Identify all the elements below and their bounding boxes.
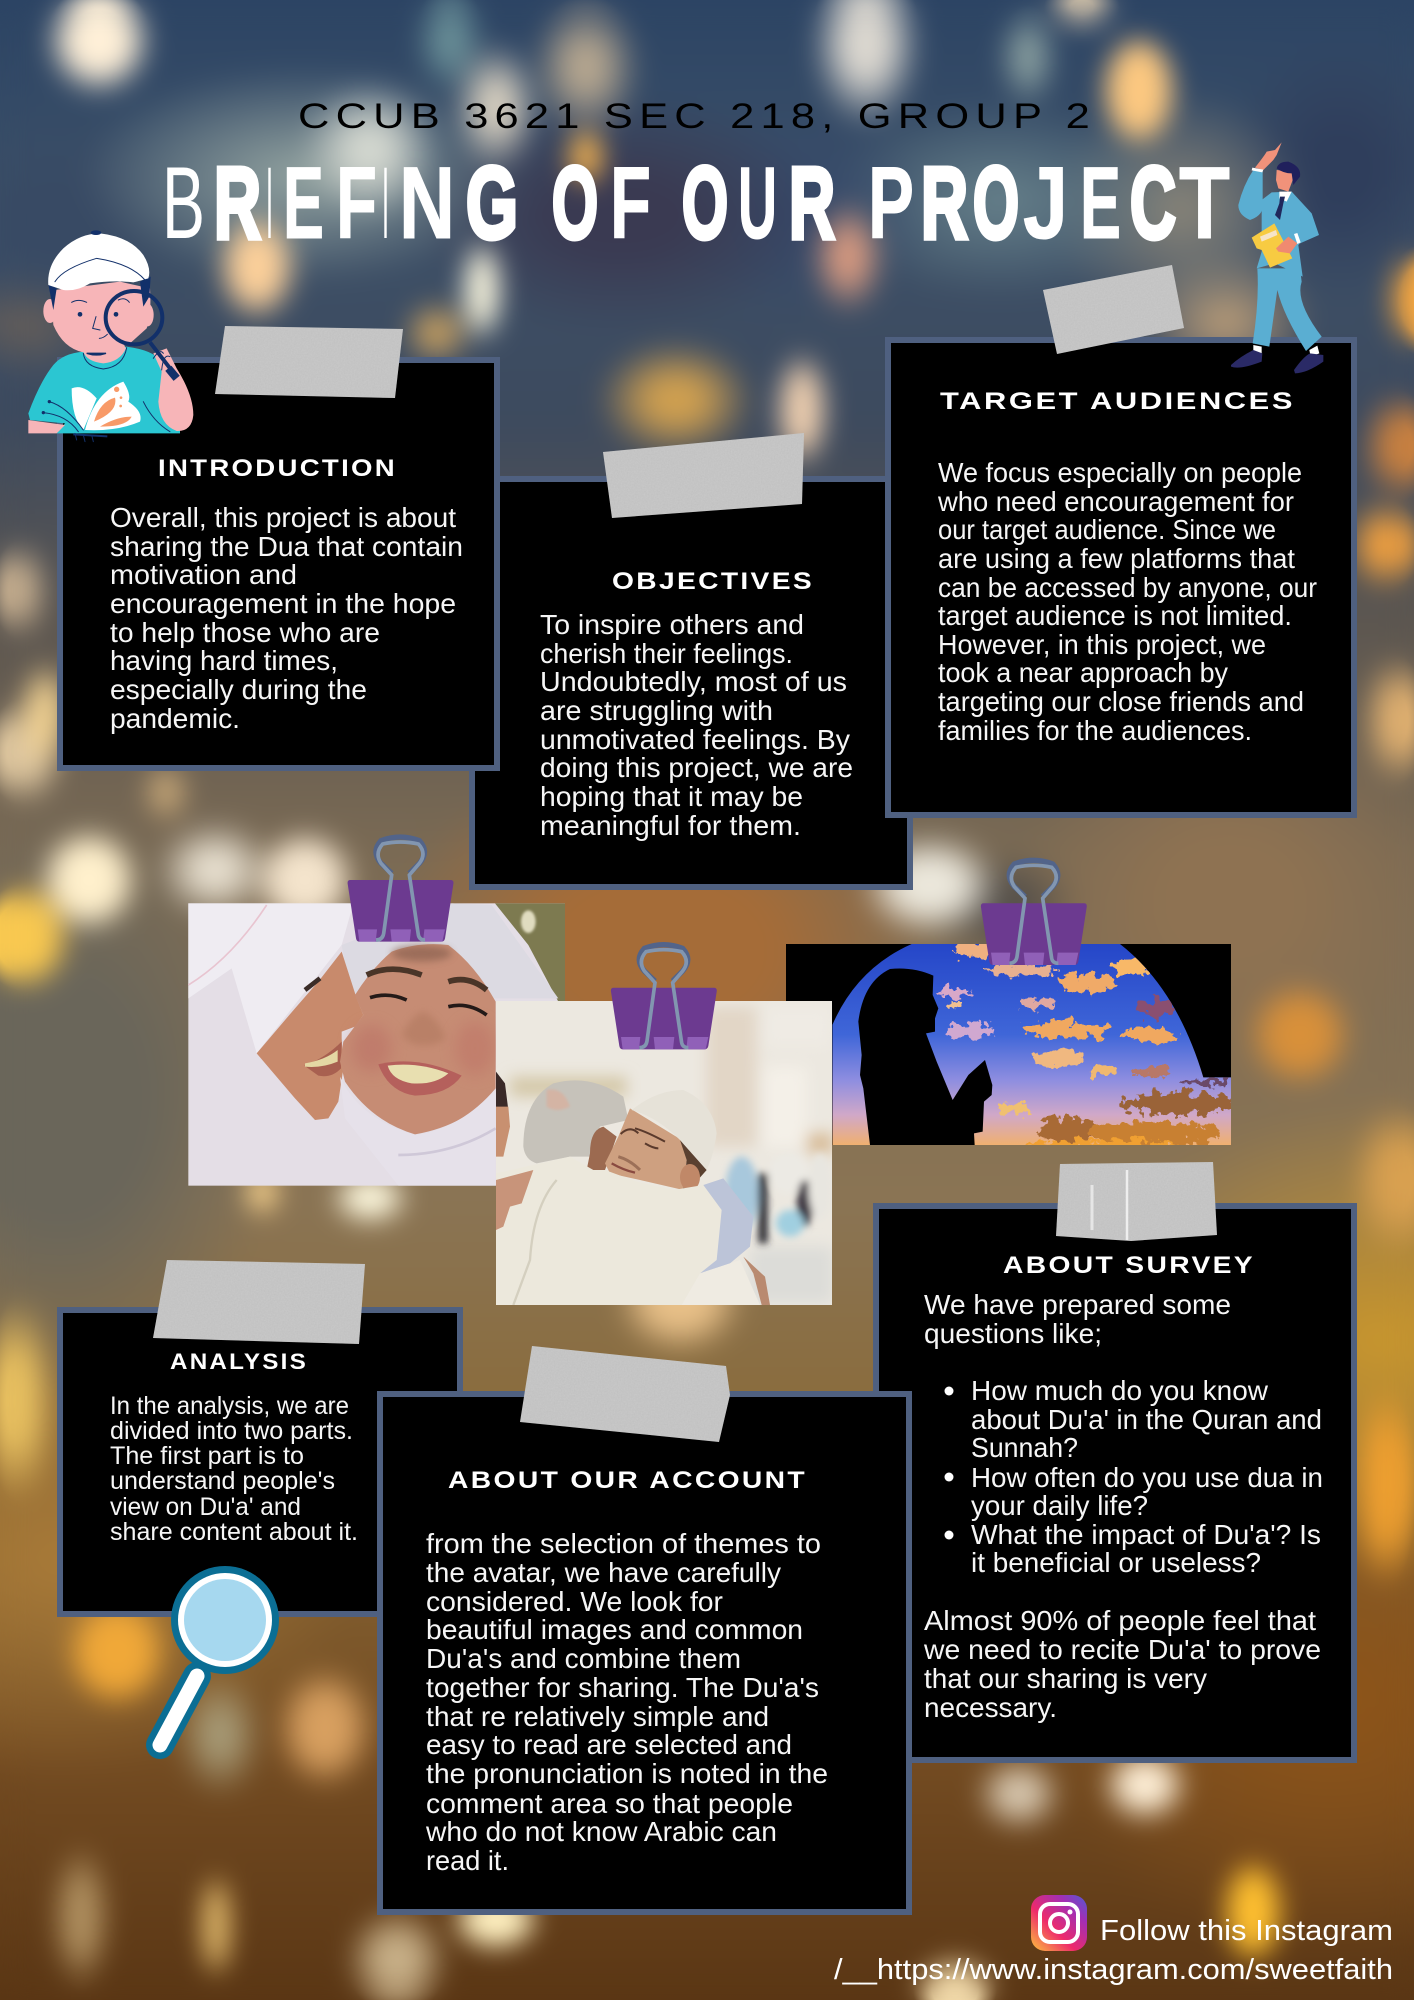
cap: [48, 233, 149, 290]
background man: [496, 1072, 508, 1117]
title: B: [162, 146, 205, 260]
mother face: [257, 952, 363, 1120]
panel: about survey: [876, 1162, 1354, 1760]
child scarf: [340, 1077, 496, 1186]
list: survey questions: [944, 1375, 1323, 1578]
mother smile: [304, 1042, 342, 1076]
text: survey intro: questions like;: [924, 1318, 1102, 1349]
heading: introduction: INTRODUCTION: [158, 455, 397, 482]
text: account body: easy to read are selected and: [426, 1729, 792, 1760]
text: target audiences body: families for the audiences.: [938, 715, 1252, 746]
photo: sky silhouette: [786, 943, 1235, 1149]
text: introduction body: having hard times,: [110, 645, 338, 676]
text: introduction body: pandemic.: [110, 703, 240, 734]
text: survey result: necessary.: [924, 1692, 1057, 1723]
text: objectives body: To inspire others and: [540, 609, 804, 640]
raised arm: [1238, 170, 1263, 220]
tape: [1056, 1162, 1217, 1241]
nose: [402, 1012, 446, 1045]
panel: about our account: [380, 1346, 909, 1912]
text: objectives body: are struggling with: [540, 695, 773, 726]
shirt: [28, 347, 180, 433]
arm: [153, 348, 193, 431]
text: target audiences body: We focus especially on people: [938, 457, 1302, 488]
face: [78, 312, 82, 317]
brows and eyes: [367, 969, 487, 990]
text: account body: [425, 1528, 828, 1876]
text: objectives body: meaningful for them.: [540, 810, 801, 841]
magnifier: [150, 342, 170, 368]
head: [43, 299, 57, 323]
text: instagram link: /__https://www.instagram.com/sweetfaith: [834, 1954, 1393, 1986]
folder: [1252, 223, 1292, 268]
text: target audiences body: who need encouragement for: [937, 486, 1294, 517]
text: introduction body: motivation and: [110, 559, 297, 590]
head: [1276, 170, 1293, 192]
text: objectives body: unmotivated feelings. By: [540, 724, 850, 755]
list: survey questions: your daily life?: [971, 1490, 1148, 1521]
tape: [153, 1260, 365, 1344]
socks: [1253, 345, 1319, 357]
blurred hall: [510, 1007, 833, 1303]
child face: [340, 944, 496, 1134]
text: account body: the pronunciation is noted in the: [426, 1758, 828, 1789]
text: survey intro: [924, 1289, 1231, 1349]
binder clip 3: [981, 860, 1087, 965]
tape: [1043, 265, 1184, 354]
text: introduction body: Overall, this project is about: [110, 502, 456, 533]
silhouette: [858, 969, 992, 1145]
hair: [48, 284, 57, 310]
title: T: [1179, 146, 1230, 260]
panel: target audiences: [888, 265, 1354, 815]
text: objectives body: Undoubtedly, most of us: [540, 666, 847, 697]
title: U: [738, 146, 777, 260]
white robe: [496, 1157, 722, 1305]
text: survey result: Almost 90% of people feel that: [924, 1605, 1316, 1636]
text: analysis body: The first part is to: [110, 1442, 304, 1470]
text: target audiences body: target audience is not limited.: [938, 600, 1292, 631]
text: objectives body: [540, 609, 853, 841]
text: target audiences body: took a near approach by: [938, 657, 1228, 688]
text: survey result: that our sharing is very: [924, 1663, 1207, 1694]
text: objectives body: hoping that it may be: [540, 781, 803, 812]
text: account body: comment area so that people: [426, 1788, 793, 1819]
title: F: [336, 146, 377, 260]
text: account body: Du'a's and combine them: [426, 1643, 741, 1674]
heading: analysis: ANALYSIS: [170, 1349, 308, 1374]
text: target audiences body: targeting our close friends and: [938, 686, 1304, 717]
child hijab: [342, 903, 558, 998]
illustration: child with magnifier: [28, 230, 193, 442]
text: analysis body: view on Du'a' and: [110, 1493, 301, 1521]
sky and clouds: [830, 943, 1235, 1149]
list: survey questions: it beneficial or useless?: [971, 1547, 1261, 1578]
title: G: [466, 146, 518, 260]
shirt and tie: [1279, 192, 1292, 202]
shoes: [1231, 350, 1262, 368]
child smile: [378, 1061, 462, 1096]
hand: [1255, 142, 1282, 170]
title: F: [610, 146, 651, 260]
text: account body: beautiful images and common: [426, 1614, 803, 1645]
text: introduction body: especially during the: [110, 674, 367, 705]
title: E: [1080, 146, 1121, 260]
title: J: [1023, 146, 1068, 260]
icon: instagram: [1031, 1895, 1087, 1951]
title: O: [552, 146, 598, 260]
text: analysis body: understand people's: [110, 1467, 335, 1495]
text: analysis body: divided into two parts.: [110, 1417, 353, 1445]
title: N: [399, 146, 455, 260]
panel: introduction: [60, 326, 497, 768]
arms: [496, 1170, 533, 1230]
panel: objectives: [472, 433, 910, 887]
text: introduction body: sharing the Dua that contain: [110, 531, 463, 562]
text: introduction body: encouragement in the hope: [110, 588, 456, 619]
text: account body: the avatar, we have carefully: [426, 1557, 781, 1588]
text: survey result: [923, 1605, 1321, 1723]
title: R: [214, 146, 261, 260]
young man: [605, 1108, 687, 1190]
text: target audiences body: However, in this project, we: [938, 629, 1266, 660]
text: introduction body: to help those who are: [110, 617, 380, 648]
text: analysis body: [110, 1392, 358, 1546]
list: survey questions: Sunnah?: [971, 1432, 1078, 1463]
tape: [215, 326, 403, 398]
text: analysis body: share content about it.: [110, 1518, 358, 1546]
title: O: [973, 146, 1019, 260]
heading: about survey: ABOUT SURVEY: [1003, 1252, 1255, 1279]
text: account body: together for sharing. The Du'a's: [426, 1672, 819, 1703]
mother veil: [188, 903, 353, 1053]
title: P: [868, 146, 914, 260]
text: analysis body: In the analysis, we are: [110, 1392, 349, 1420]
title: O: [682, 146, 728, 260]
trousers: [1253, 268, 1322, 351]
tape: [520, 1346, 730, 1442]
heading: objectives: OBJECTIVES: [612, 568, 814, 595]
title: I: [266, 146, 273, 260]
jacket: [1257, 192, 1319, 277]
blue robe: [700, 1178, 753, 1273]
photo: two men embracing: [496, 1001, 833, 1305]
text: objectives body: cherish their feelings.: [540, 638, 793, 669]
list: survey questions: How often do you use dua in: [971, 1462, 1323, 1493]
title: I: [382, 146, 389, 260]
text: target audiences body: our target audience. Since we: [938, 514, 1276, 545]
tape: [603, 433, 804, 518]
list: survey questions: about Du'a' in the Quran and: [971, 1404, 1322, 1435]
heading: about our account: ABOUT OUR ACCOUNT: [448, 1467, 807, 1494]
list: survey questions: How much do you know: [971, 1375, 1269, 1406]
holding hand: [1276, 237, 1297, 253]
elder head: [523, 1080, 628, 1163]
photo: mother and child: [188, 903, 565, 1186]
blurred crowd: [725, 1153, 832, 1243]
title: R: [921, 146, 968, 260]
text: account body: considered. We look for: [426, 1586, 723, 1617]
text: objectives body: doing this project, we are: [540, 752, 853, 783]
text: instagram follow: Follow this Instagram: [1100, 1915, 1393, 1947]
neck: [83, 338, 126, 363]
butterfly: [72, 387, 97, 430]
subtitle: CCUB 3621 SEC 218, GROUP 2: [298, 97, 1096, 136]
text: target audiences body: can be accessed by anyone, our: [938, 572, 1317, 603]
text: introduction body: [110, 502, 463, 734]
text: account body: who do not know Arabic can: [425, 1816, 777, 1847]
list: survey questions: What the impact of Du'a'? Is: [971, 1519, 1321, 1550]
text: account body: read it.: [426, 1845, 509, 1876]
text: survey result: we need to recite Du'a' to prove: [923, 1634, 1321, 1665]
olive background corner: [495, 903, 565, 1002]
illustration: man in blue suit pointing up: [1231, 142, 1323, 373]
title: R: [789, 146, 835, 260]
binder clip 1: [348, 837, 453, 942]
text: account body: that re relatively simple and: [426, 1701, 769, 1732]
icon: magnifying glass: [160, 1566, 279, 1745]
heading: target audiences: TARGET AUDIENCES: [940, 388, 1295, 415]
text: target audiences body: [937, 457, 1317, 746]
text: survey intro: We have prepared some: [924, 1289, 1231, 1320]
text: target audiences body: are using a few platforms that: [938, 543, 1295, 574]
title: C: [1130, 146, 1176, 260]
panel: analysis: [60, 1260, 460, 1614]
text: account body: from the selection of themes to: [426, 1528, 821, 1559]
binder clip 2: [611, 945, 717, 1049]
title: E: [283, 146, 324, 260]
